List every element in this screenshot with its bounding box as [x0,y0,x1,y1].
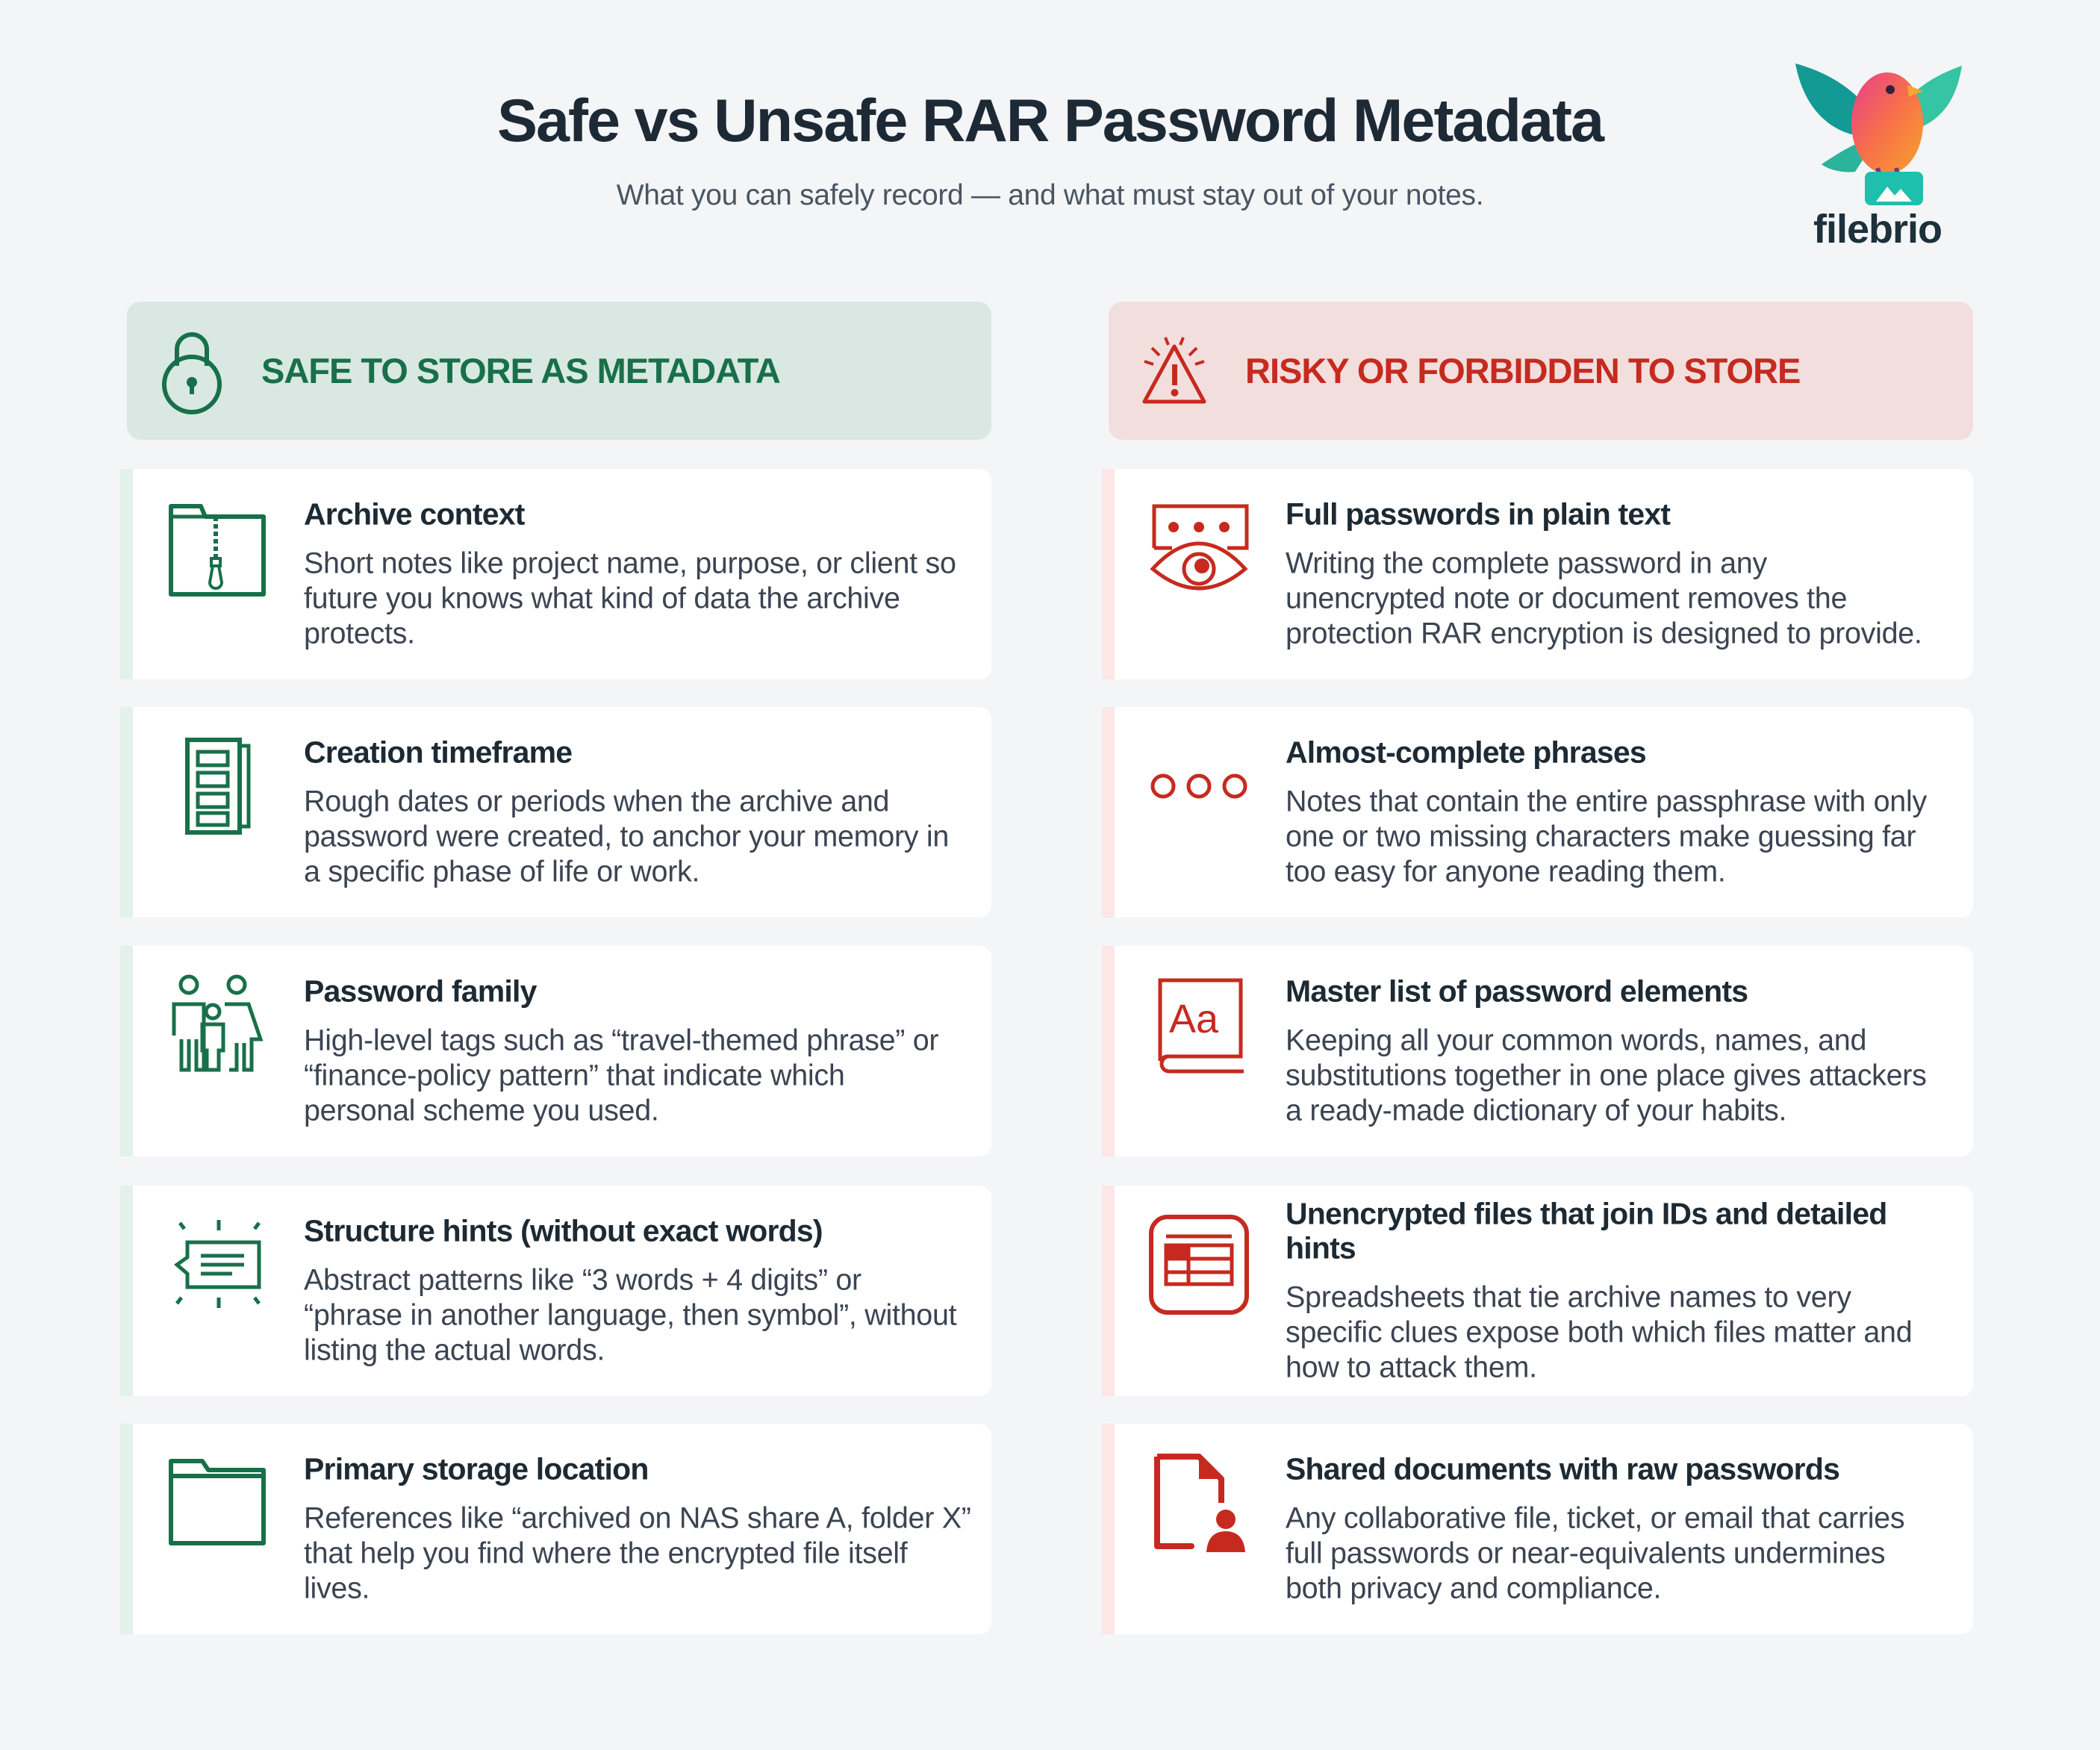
card: unencrypted files [1102,1186,1973,1396]
card: creation timeframe: Creation timeframe [304,735,572,769]
card: structure hints: Abstract patterns like “3 words + 4 digits” or [304,1263,862,1296]
card: almost-complete phrases [1102,707,1973,918]
card: master list: Master list of password elements [1286,974,1748,1008]
panel header: safe: SAFE TO STORE AS METADATA [261,351,780,390]
icon: zip folder [169,504,266,597]
card: master list: substitutions together in one place gives attackers [1286,1059,1927,1092]
card: full passwords [1102,469,1973,679]
card: shared documents: Any collaborative file, ticket, or email that carries [1286,1502,1904,1535]
icon: warning [1142,337,1206,403]
icon: folder [169,1459,266,1545]
card: creation timeframe: Rough dates or periods when the archive and [304,785,889,818]
card: full passwords: Full passwords in plain text [1286,497,1670,532]
icon: calendar [185,738,251,835]
card: shared documents [1102,1424,1973,1634]
card: full passwords: protection RAR encryption is designed to provide. [1286,617,1922,650]
card: primary storage location: References like “archived on NAS share A, folder X” [304,1502,971,1535]
logo: filebrio [1795,63,1962,252]
card: primary storage location: that help you find where the encrypted file itself [304,1536,907,1569]
card: unencrypted files: Spreadsheets that tie archive names to very [1286,1281,1851,1314]
icon: padlock [162,332,222,414]
card: password family: High-level tags such as “travel-themed phrase” or [304,1024,938,1057]
card: password family: Password family [304,974,537,1008]
card: primary storage location: Primary storage location [304,1451,649,1486]
icon: eye screen [1150,505,1248,591]
panel header: risky: RISKY OR FORBIDDEN TO STORE [1245,351,1800,390]
card: password family: “finance-policy pattern” that indicate which [304,1059,845,1092]
card: unencrypted files: how to attack them. [1286,1351,1537,1384]
card: primary storage location: lives. [304,1572,370,1605]
icon: spreadsheet [1149,1215,1249,1315]
card: full passwords: Writing the complete password in any [1286,547,1767,579]
card: almost-complete phrases: too easy for anyone reading them. [1286,856,1726,888]
card: almost-complete phrases: one or two missing characters make guessing far [1286,820,1916,853]
card: structure hints: “phrase in another language, then symbol”, without [304,1299,956,1332]
card: almost-complete phrases: Notes that contain the entire passphrase with only [1286,785,1927,818]
card: archive context: protects. [304,617,415,650]
card: archive context: Archive context [304,497,525,532]
icon: shared document user [1154,1454,1245,1552]
icon: dictionary [1159,978,1244,1074]
subtitle: What you can safely record — and what must stay out of your notes. [617,179,1483,211]
card: creation timeframe [120,707,991,918]
card: master list: Keeping all your common words, names, and [1286,1024,1866,1057]
card: password family [120,946,991,1156]
card: structure hints: Structure hints (without exact words) [304,1214,823,1248]
icon: family [172,975,263,1072]
card: almost-complete phrases: Almost-complete phrases [1286,735,1646,769]
icon: dictionary: Aa [1169,997,1219,1041]
card: creation timeframe: password were created, to anchor your memory in [304,820,949,853]
card: archive context: future you knows what kind of data the archive [304,582,900,615]
card: shared documents: both privacy and compliance. [1286,1572,1661,1605]
panel header: risky [1109,302,1973,440]
card: full passwords: unencrypted note or document removes the [1286,582,1847,615]
card: archive context: Short notes like project name, purpose, or client so [304,547,956,579]
card: password family: personal scheme you used. [304,1094,659,1127]
card: archive context [120,469,991,679]
card: master list [1102,946,1973,1156]
icon: message hints [174,1220,261,1308]
card: primary storage location [120,1424,991,1634]
card: structure hints: listing the actual words. [304,1333,605,1366]
card: unencrypted files: hints [1286,1230,1356,1265]
card: shared documents: Shared documents with raw passwords [1286,1451,1839,1486]
card: unencrypted files: specific clues expose both which files matter and [1286,1315,1912,1348]
card: shared documents: full passwords or near-equivalents undermines [1286,1536,1885,1569]
card: unencrypted files: Unencrypted files that join IDs and detailed [1286,1196,1886,1230]
card: structure hints [120,1186,991,1396]
card: master list: a ready-made dictionary of your habits. [1286,1094,1786,1127]
title: Safe vs Unsafe RAR Password Metadata [497,87,1603,155]
panel header: safe [127,302,991,440]
logo: filebrio: filebrio [1813,207,1942,252]
card: creation timeframe: a specific phase of life or work. [304,856,700,888]
icon: three circles [1151,773,1247,799]
